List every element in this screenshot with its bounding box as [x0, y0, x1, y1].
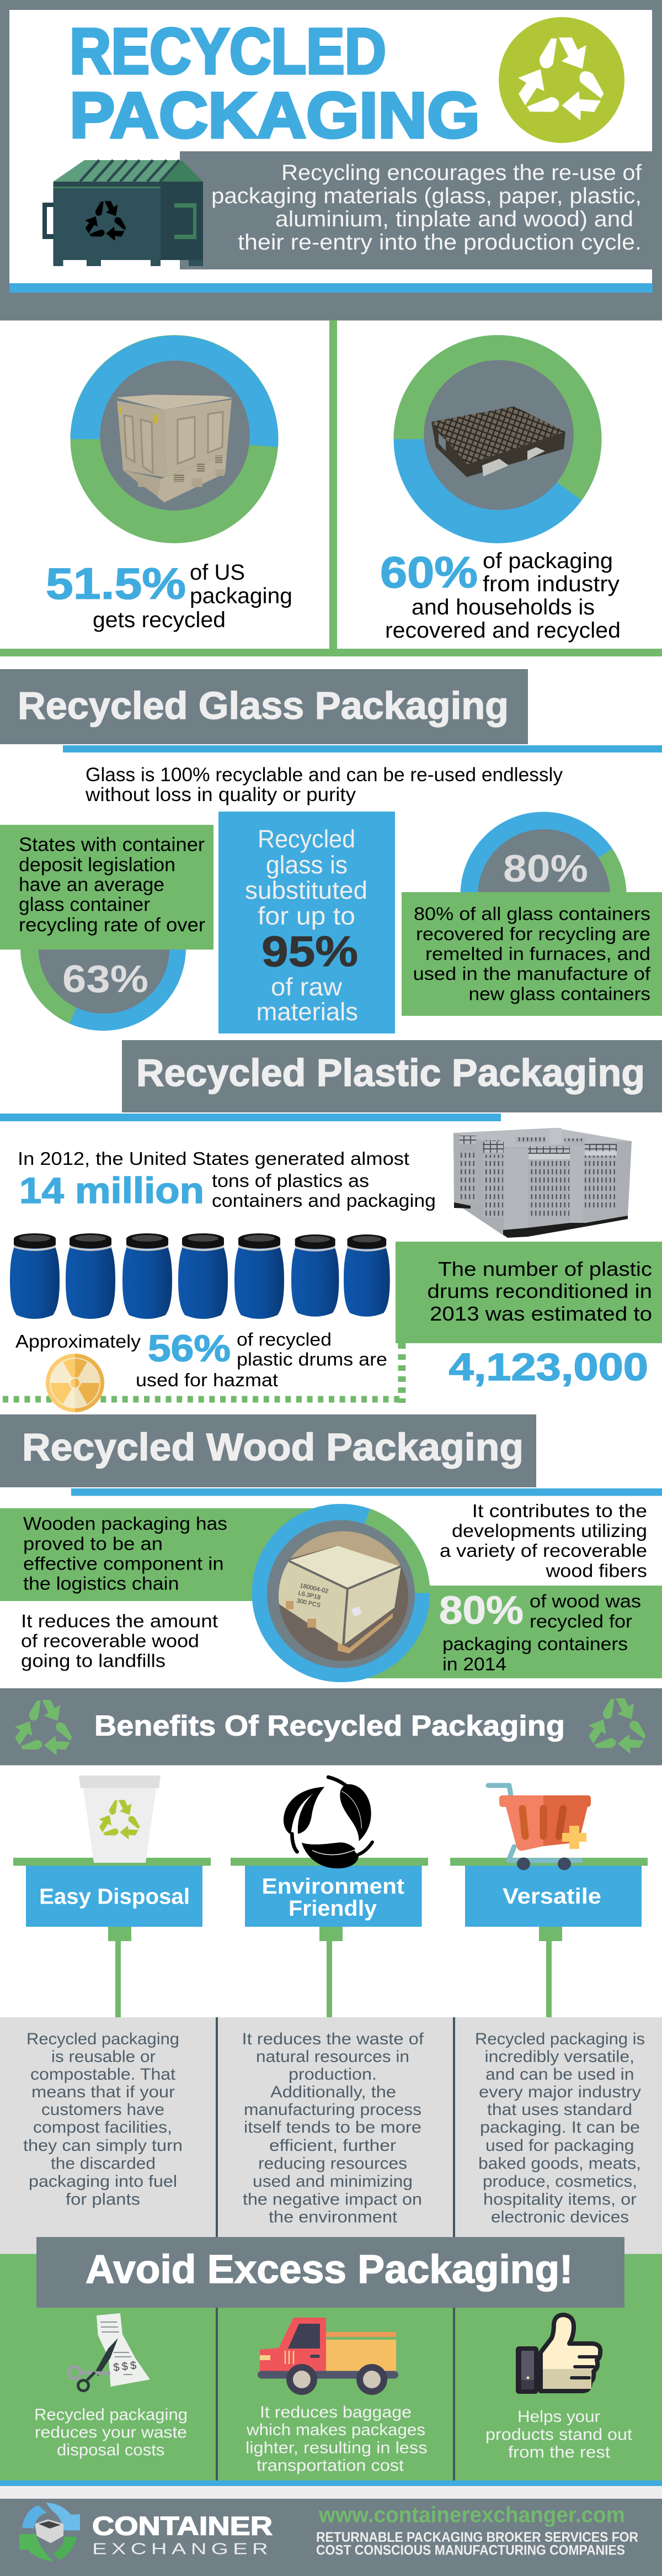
callout: containers remelted: recovered for recycling are: [416, 924, 650, 944]
stat: 56% hazmat drums: used for hazmat: [136, 1370, 278, 1390]
text: glass is recyclable: Glass is 100% recyclable and can be re-used endlessly: [86, 764, 563, 786]
benefit: easy disposal: Easy Disposal: [39, 1885, 190, 1909]
stat: 80% wood recycled: in 2014: [442, 1654, 506, 1674]
icon: plastic bulk bin: [453, 1128, 632, 1238]
callout: states with deposit legislation: glass container: [19, 894, 150, 915]
chart: 63% donut: 63%: [62, 957, 148, 1000]
text: 14 million tons: containers and packaging: [212, 1190, 436, 1211]
text: easy disposal description: for plants: [66, 2191, 140, 2209]
text: glass is recyclable: without loss in quality or purity: [85, 784, 356, 805]
panel: recycling statistics: [0, 320, 662, 656]
stat: 60%: 60%: [380, 548, 478, 597]
icon: recycling badge: [499, 17, 624, 143]
callout: 95% raw materials: of raw: [271, 973, 343, 1001]
stat: 56% hazmat drums: Approximately: [15, 1331, 141, 1351]
heading: recycled glass packaging: Recycled Glass Packaging: [18, 684, 509, 727]
heading: benefits of recycled packaging: [0, 1688, 662, 1766]
stat: 80% wood recycled: packaging containers: [442, 1634, 628, 1654]
text: recoverable wood fibers: wood fibers: [545, 1560, 647, 1581]
stat: 56% hazmat drums: of recycled: [237, 1329, 332, 1349]
icon: shopping cart: [488, 1785, 591, 1870]
icon: scissors cutting receipt: $ $ $: [113, 2360, 137, 2374]
callout: states with deposit legislation: [0, 825, 213, 950]
icon: delivery truck: [258, 2318, 398, 2395]
text: reduces landfill wood: going to landfills: [21, 1651, 166, 1671]
stat: 51.5%: 51.5%: [46, 559, 186, 608]
callout: states with deposit legislation: recycling rate of over: [19, 914, 205, 936]
callout: containers remelted: 80% of all glass containers: [414, 903, 650, 924]
benefit: versatile: Versatile: [503, 1884, 601, 1909]
chart: 63% donut: [20, 865, 186, 1031]
icon: recycle right: [584, 1698, 650, 1756]
callout: reconditioned drums: drums reconditioned in: [427, 1280, 652, 1302]
website and tagline: COST CONSCIOUS MANUFACTURING COMPANIES: [316, 2543, 625, 2558]
chart: 60% donut: [394, 335, 601, 543]
text: reduces baggage: lighter, resulting in less: [245, 2439, 427, 2457]
stat: 51.5%: packaging: [190, 584, 292, 608]
icon: thumbs up: [516, 2315, 600, 2394]
stat: 60%: [380, 548, 621, 643]
text: easy disposal description: they can simply turn: [23, 2137, 183, 2155]
callout: 95% raw materials: 95%: [261, 927, 358, 976]
icon: recycling cup: [79, 1775, 161, 1863]
panel: benefit columns: [0, 1775, 662, 2254]
callout: containers remelted: used in the manufacture of: [413, 963, 651, 984]
text: environment description: manufacturing process: [244, 2101, 421, 2119]
chart: 80% donut: [460, 812, 627, 978]
intro text block: Recycling encourages the re-use of: [281, 161, 642, 185]
text: reduces baggage: It reduces baggage: [260, 2403, 412, 2421]
stat: 80% wood recycled: recycled for: [530, 1611, 632, 1631]
text: reduces disposal costs: reduces your waste: [35, 2423, 187, 2441]
title: RECYCLED: [70, 15, 386, 87]
text: easy disposal description: customers have: [41, 2101, 164, 2119]
stat: 60%: from industry: [483, 572, 620, 596]
text: easy disposal description: means that if your: [31, 2083, 175, 2101]
text: logistics chain: proved to be an: [23, 1534, 163, 1554]
stat: 80% wood recycled: of wood was: [530, 1591, 641, 1612]
panel: plastic facts: [3, 1128, 662, 1412]
text: 14 million tons: tons of plastics as: [212, 1170, 369, 1191]
title: PACKAGING: [70, 79, 480, 151]
text: reduces disposal costs: disposal costs: [57, 2441, 164, 2460]
text: versatile description: used for packaging: [485, 2137, 634, 2155]
text: 14 million tons: In 2012, the United States generated almost: [18, 1148, 409, 1169]
text: environment description: reducing resources: [258, 2154, 407, 2172]
text: versatile description: Recycled packaging is: [475, 2030, 645, 2048]
text: easy disposal description: the discarded: [51, 2154, 156, 2172]
text: environment description: [242, 2030, 424, 2227]
callout: 95% raw materials: for up to: [258, 902, 355, 930]
text: environment description: itself tends to be more: [244, 2118, 421, 2137]
text: versatile description: produce, cosmetics,: [483, 2172, 637, 2191]
benefit: easy disposal: [13, 1775, 211, 2209]
text: versatile description: every major industry: [479, 2083, 641, 2101]
panel: header: [0, 0, 662, 320]
callout: reconditioned drums: 2013 was estimated to: [430, 1302, 652, 1325]
icon: scissors cutting receipt: [68, 2313, 150, 2391]
benefit: environment friendly: Environment: [261, 1874, 404, 1899]
callout: 95% raw materials: Recycled: [258, 825, 355, 853]
callout: states with deposit legislation: have an average: [19, 874, 164, 895]
icon: three leaves: [284, 1777, 372, 1868]
text: recoverable wood fibers: developments utilizing: [452, 1520, 647, 1541]
text: versatile description: and can be used in: [485, 2065, 634, 2084]
text: versatile description: electronic devices: [491, 2208, 629, 2227]
callout: reconditioned drums: The number of plastic: [438, 1258, 652, 1280]
text: environment description: efficient, further: [269, 2137, 396, 2155]
icon: container exchanger logo: [19, 2503, 80, 2562]
intro text block: [180, 151, 652, 269]
text: environment description: It reduces the waste of: [242, 2030, 424, 2048]
text: versatile description: baked goods, meats,: [478, 2154, 641, 2172]
text: reduces baggage: which makes packages: [246, 2421, 425, 2439]
callout: states with deposit legislation: States with container: [19, 834, 205, 856]
text: recoverable wood fibers: [440, 1501, 647, 1581]
stat: 56% hazmat drums: [15, 1327, 387, 1390]
text: glass is recyclable: [85, 764, 563, 805]
text: reduces landfill wood: of recoverable wood: [21, 1631, 199, 1651]
text: versatile description: that uses standard: [487, 2101, 632, 2119]
text: logistics chain: [23, 1513, 227, 1593]
heading: recycled plastic packaging: Recycled Plastic Packaging: [136, 1051, 645, 1094]
callout: 95% raw materials: [218, 812, 395, 1033]
text: environment description: the environment: [269, 2208, 398, 2227]
stat: 56% hazmat drums: 56%: [148, 1327, 231, 1369]
icon: blue plastic drums: [10, 1233, 390, 1319]
icon: recycle left: [10, 1700, 77, 1758]
text: 14 million tons: [18, 1148, 436, 1211]
text: environment description: the negative impact on: [243, 2191, 422, 2209]
text: reduces disposal costs: [34, 2405, 188, 2460]
callout: containers remelted: remelted in furnaces, and: [425, 944, 650, 964]
heading: recycled glass packaging: [0, 669, 662, 752]
chart: 80% donut: 80%: [503, 847, 588, 890]
website and tagline: [316, 2503, 638, 2558]
text: logistics chain: Wooden packaging has: [23, 1513, 227, 1534]
stat: 51.5%: of US: [190, 560, 245, 585]
text: reduces baggage: transportation cost: [257, 2456, 404, 2474]
heading: recycled plastic packaging: [0, 1040, 662, 1121]
panel: avoid excess packaging: [0, 2237, 662, 2480]
logo wordmark: [92, 2511, 273, 2558]
intro text block: their re-entry into the production cycle.: [238, 230, 642, 255]
text: logistics chain: effective component in: [23, 1554, 224, 1573]
callout: states with deposit legislation: deposit legislation: [19, 854, 175, 876]
icon: dumpster: [42, 160, 203, 266]
text: reduces landfill wood: [21, 1611, 218, 1671]
heading: recycled wood packaging: [0, 1414, 662, 1496]
footer: [0, 2499, 662, 2576]
title: [70, 15, 480, 151]
heading: benefits of recycled packaging: Benefits Of Recycled Packaging: [94, 1710, 565, 1742]
text: environment description: Additionally, the: [270, 2083, 396, 2101]
text: versatile description: incredibly versatile,: [484, 2048, 634, 2066]
text: reduces landfill wood: It reduces the amount: [21, 1611, 218, 1631]
heading: recycled wood packaging: Recycled Wood Packaging: [22, 1425, 524, 1469]
text: stand out: [485, 2408, 633, 2461]
callout: reconditioned drums: [396, 1242, 662, 1343]
intro text block: packaging materials (glass, paper, plastic,: [211, 184, 642, 208]
callout: 95% raw materials: materials: [256, 998, 358, 1026]
text: easy disposal description: [23, 2030, 183, 2209]
text: versatile description: [475, 2030, 645, 2227]
heading: avoid excess packaging: Avoid Excess Packaging!: [86, 2248, 573, 2292]
stat: 51.5%: gets recycled: [93, 608, 226, 632]
icon: hazmat symbol: [46, 1354, 104, 1412]
text: easy disposal description: compost facilities,: [33, 2118, 172, 2137]
text: easy disposal description: compostable. That: [30, 2065, 176, 2084]
chart: wood donut with crate photo: L6.3P18: [297, 1590, 321, 1601]
callout: containers remelted: new glass containers: [469, 984, 650, 1004]
text: reduces baggage: [245, 2403, 427, 2474]
website and tagline: www.containerexchanger.com: [318, 2503, 625, 2527]
benefit: environment friendly: Friendly: [289, 1896, 377, 1921]
text: easy disposal description: Recycled packaging: [26, 2030, 179, 2048]
chart: wood donut with crate photo: 180004-02: [299, 1582, 329, 1595]
benefit: environment friendly: [231, 1777, 428, 2227]
stat: 60%: recovered and recycled: [385, 618, 621, 643]
callout: 95% raw materials: glass is: [266, 851, 348, 879]
text: versatile description: packaging. It can be: [480, 2118, 640, 2137]
text: easy disposal description: packaging into fuel: [29, 2172, 177, 2191]
stat: 56% hazmat drums: plastic drums are: [237, 1349, 387, 1369]
chart: wood donut with crate photo: 300 PCS: [296, 1598, 321, 1609]
logo wordmark: EXCHANGER: [92, 2541, 273, 2558]
text: recoverable wood fibers: It contributes to the: [472, 1501, 647, 1521]
intro text block: aluminium, tinplate and wood) and: [275, 207, 633, 231]
text: 14 million tons: 14 million: [19, 1170, 204, 1211]
text: reduces disposal costs: Recycled packaging: [34, 2405, 188, 2424]
stat: 60%: and households is: [412, 595, 595, 619]
text: recoverable wood fibers: a variety of recoverable: [440, 1540, 647, 1561]
benefit: versatile: [450, 1785, 648, 2227]
chart: 51.5% donut: [71, 335, 278, 543]
panel: glass facts: [0, 764, 662, 1033]
text: stand out: Helps your: [517, 2408, 600, 2426]
text: environment description: production.: [289, 2065, 377, 2084]
text: environment description: natural resources in: [256, 2048, 409, 2066]
chart: wood donut with crate photo: [252, 1504, 430, 1682]
stat: 80% wood recycled: 80%: [439, 1589, 524, 1632]
text: versatile description: hospitality items, or: [483, 2191, 637, 2209]
stat: 80% wood recycled: [439, 1589, 641, 1674]
heading: avoid excess packaging: [36, 2237, 624, 2308]
stat: 4,123,000: 4,123,000: [449, 1345, 648, 1388]
text: stand out: products stand out: [485, 2425, 633, 2444]
text: stand out: from the rest: [508, 2443, 611, 2461]
stat: 51.5%: [46, 559, 292, 632]
text: logistics chain: the logistics chain: [23, 1573, 179, 1593]
panel: wood facts: [0, 1501, 662, 1682]
text: environment description: used and minimizing: [253, 2172, 413, 2191]
stat: 60%: of packaging: [483, 549, 613, 573]
callout: containers remelted: [402, 892, 662, 1016]
text: easy disposal description: is reusable or: [51, 2048, 156, 2066]
website and tagline: RETURNABLE PACKAGING BROKER SERVICES FOR: [316, 2530, 638, 2545]
logo wordmark: CONTAINER: [92, 2511, 273, 2541]
callout: 95% raw materials: substituted: [245, 876, 367, 904]
